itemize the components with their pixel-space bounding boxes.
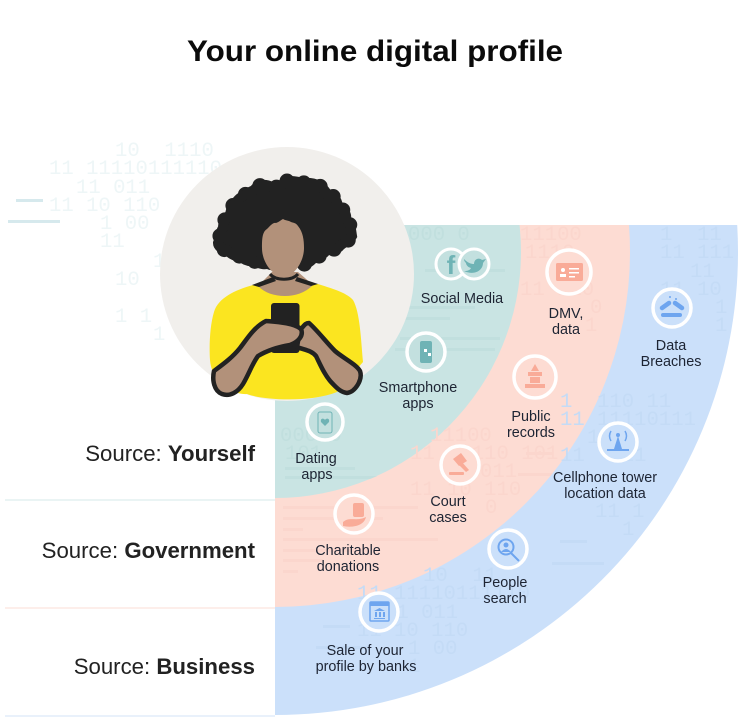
source label: government: Source: Government	[42, 538, 256, 563]
left arm	[213, 321, 302, 395]
face	[270, 274, 298, 279]
band textures: 11	[560, 261, 585, 284]
label: court cases: Court	[430, 494, 466, 510]
neck	[258, 272, 313, 296]
background binary pattern: 1	[153, 251, 165, 274]
label: charitable donations: donations	[317, 559, 379, 575]
background binary pattern: 1 1	[115, 306, 152, 329]
band textures: 1 00	[408, 638, 457, 661]
band textures: 0	[590, 297, 602, 320]
label: sale of your profile by banks: profile by banks	[316, 659, 416, 675]
label: dmv data: DMV,	[549, 306, 583, 322]
band textures: 11 10 110	[410, 479, 521, 502]
band textures: 11 10	[660, 279, 722, 302]
background binary pattern: 11 10 110	[49, 195, 160, 218]
band textures: 11 11110111110	[357, 583, 530, 606]
band textures: 11 111	[660, 242, 734, 265]
source label: yourself: Source: Yourself	[85, 441, 256, 466]
background binary pattern: 11 11110111110	[49, 158, 222, 181]
band: yourself	[275, 225, 521, 498]
band textures: 11	[690, 261, 715, 284]
label: charitable donations: Charitable	[315, 543, 381, 559]
icon: public building	[514, 356, 556, 398]
title: Your online digital profile	[187, 35, 563, 68]
background binary pattern: 11	[100, 231, 125, 254]
band textures: 11 11110111	[560, 409, 696, 432]
band textures: 11 10 110	[357, 620, 468, 643]
band textures: 0	[485, 497, 497, 520]
icon: bank	[360, 593, 398, 631]
label: smartphone apps: apps	[402, 396, 434, 412]
band textures: 1 11	[660, 224, 722, 247]
collar	[252, 277, 318, 287]
band textures: 1	[715, 315, 727, 338]
icon: smartphone apps	[407, 333, 445, 371]
band textures	[286, 226, 600, 596]
band textures: 11 11110 101	[410, 443, 558, 466]
band textures: 1	[622, 519, 634, 542]
label: data breaches: Data	[656, 338, 686, 354]
label: data breaches: Breaches	[641, 354, 701, 370]
band textures: 11	[587, 427, 612, 450]
icon: facebook: f	[447, 250, 456, 280]
band textures: 11100	[430, 425, 492, 448]
band textures: 1	[715, 297, 727, 320]
background binary pattern: 11 011	[76, 177, 150, 200]
profile circle backdrop	[160, 147, 414, 401]
band textures: 000 0	[280, 425, 342, 448]
band textures: 1110	[525, 242, 574, 265]
chart: concentric data source bands	[275, 225, 738, 715]
phone	[271, 303, 300, 353]
band textures: 11 011	[384, 602, 458, 625]
band textures: 1	[585, 315, 597, 338]
label: court cases: cases	[429, 510, 467, 526]
icon: charitable hand	[335, 495, 373, 533]
band textures: 000 0	[408, 224, 470, 247]
band: government	[275, 225, 630, 607]
background binary pattern: 10 1110	[115, 140, 214, 163]
band textures: 11 1	[595, 501, 644, 524]
label: cellphone tower location data: location data	[564, 486, 646, 502]
icon: id card	[547, 250, 591, 294]
source divider lines	[5, 500, 275, 716]
band textures: 1	[408, 656, 420, 679]
source label: business: Source: Business	[74, 654, 255, 679]
hair	[218, 181, 352, 264]
label: dating apps: apps	[301, 467, 333, 483]
band textures: 11 11	[560, 445, 647, 468]
icon: facebook	[436, 249, 466, 280]
label: smartphone apps: Smartphone	[379, 380, 457, 396]
label: public records: Public	[511, 409, 551, 425]
label: people search: People	[483, 575, 527, 591]
label: cellphone tower location data: Cellphone tower	[553, 470, 657, 486]
illustration: woman using smartphone	[210, 181, 363, 399]
band textures: 1 110 11	[560, 391, 671, 414]
band: business	[275, 225, 738, 715]
background binary pattern	[8, 140, 222, 347]
label: sale of your profile by banks: Sale of your	[327, 643, 403, 659]
label: dmv data: data	[552, 322, 580, 338]
label: social media: Social Media	[421, 291, 503, 307]
icon: twitter	[459, 249, 489, 279]
band textures: 011	[480, 461, 517, 484]
icon: people search	[489, 530, 527, 568]
background binary pattern: 1	[153, 324, 165, 347]
band textures: 11100	[520, 224, 582, 247]
label: people search: search	[483, 591, 527, 607]
band textures: 10 11	[423, 565, 497, 588]
icon: dating phone	[307, 404, 343, 440]
shirt	[210, 284, 363, 399]
icon: gavel	[441, 446, 479, 484]
background binary pattern: 10	[115, 269, 140, 292]
label: public records: records	[507, 425, 555, 441]
band textures: 11 110	[520, 279, 594, 302]
background binary pattern: 1 00	[100, 213, 149, 236]
right arm	[297, 323, 361, 393]
icon: data breach	[653, 289, 691, 327]
band textures: 101	[285, 443, 322, 466]
label: dating apps: Dating	[295, 451, 337, 467]
icon: cell tower	[599, 423, 637, 461]
